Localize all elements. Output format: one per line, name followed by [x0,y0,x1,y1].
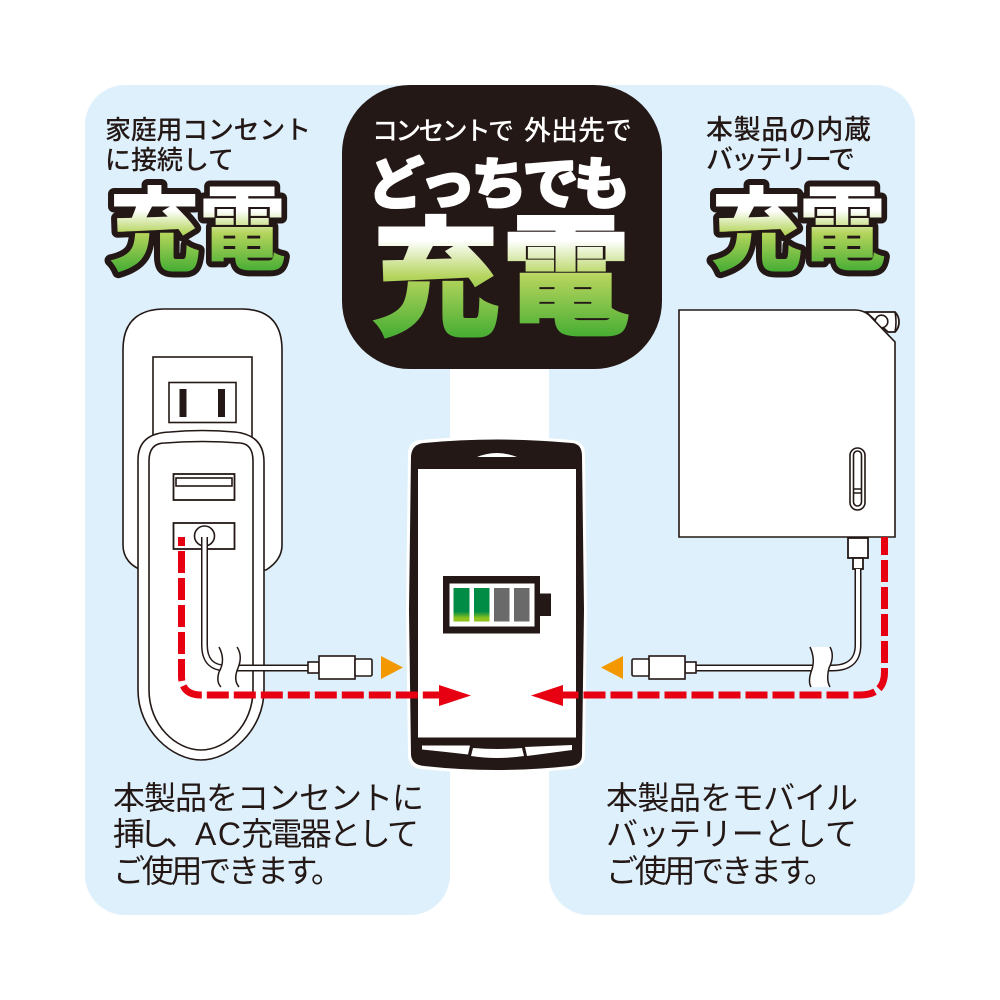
text block: left description: ご使用できます。 [113,846,343,892]
heading: right charging [711,156,886,290]
heading: left charging [109,156,286,290]
illustration: left cable and connector [204,537,372,687]
text block: left description: 挿し、 [113,809,197,855]
bottom connector [848,538,868,558]
heading: left charging: 電 [199,156,286,288]
cable port [174,523,234,549]
heading: left charging: 電 [199,156,286,288]
illustration: smartphone [406,436,587,773]
text block: left description: 本製品をコンセントに [113,773,424,819]
heading: outside: 外出先で [524,109,632,148]
panel heading: right intro text: 本製品の内蔵 [706,108,871,147]
heading: outlet: コンセントで [372,111,514,148]
arrow: red dashed right [531,537,884,706]
arrow: orange left [381,656,403,679]
text block: right description: バッテリーとして [606,809,857,855]
text block: left description: 充電器として [241,809,419,855]
heading: either way: どっちでも [368,140,630,221]
heading: charging: 充 [372,176,500,362]
slider switch [850,448,865,510]
heading: left charging: 充 [109,159,201,290]
heading: right charging: 電 [799,156,886,288]
heading: right charging: 充 [711,159,803,290]
illustration: wall outlet [123,309,282,570]
arrow: orange right [601,656,623,679]
text block: right description: 本製品をモバイル [606,773,858,819]
text block: left description [113,773,424,892]
illustration: right cable and connector [632,569,858,687]
illustration: power bank [679,310,899,569]
arrow: red dashed left [182,537,471,706]
heading: right charging: 電 [799,156,886,288]
heading: left charging: 充 [109,159,201,290]
text block: left description: AC [195,816,241,852]
text block: right description: ご使用できます。 [606,846,836,892]
panel heading: left intro text: に接続して [105,140,234,177]
panel: center title badge [342,85,662,369]
battery icon [443,576,551,634]
usb port [174,474,234,500]
panel heading: left intro text: 家庭用コンセント [105,110,311,147]
panel heading: right intro text: バッテリーで [706,138,855,177]
bottom buttons [422,746,470,754]
heading: charging: 電 [502,174,630,361]
heading: right charging: 充 [711,159,803,290]
panel: right background [549,85,915,915]
heading: charging [372,174,630,362]
illustration: charger plugged into outlet [138,430,264,760]
earpiece [477,453,517,457]
panel: left background [85,85,450,915]
